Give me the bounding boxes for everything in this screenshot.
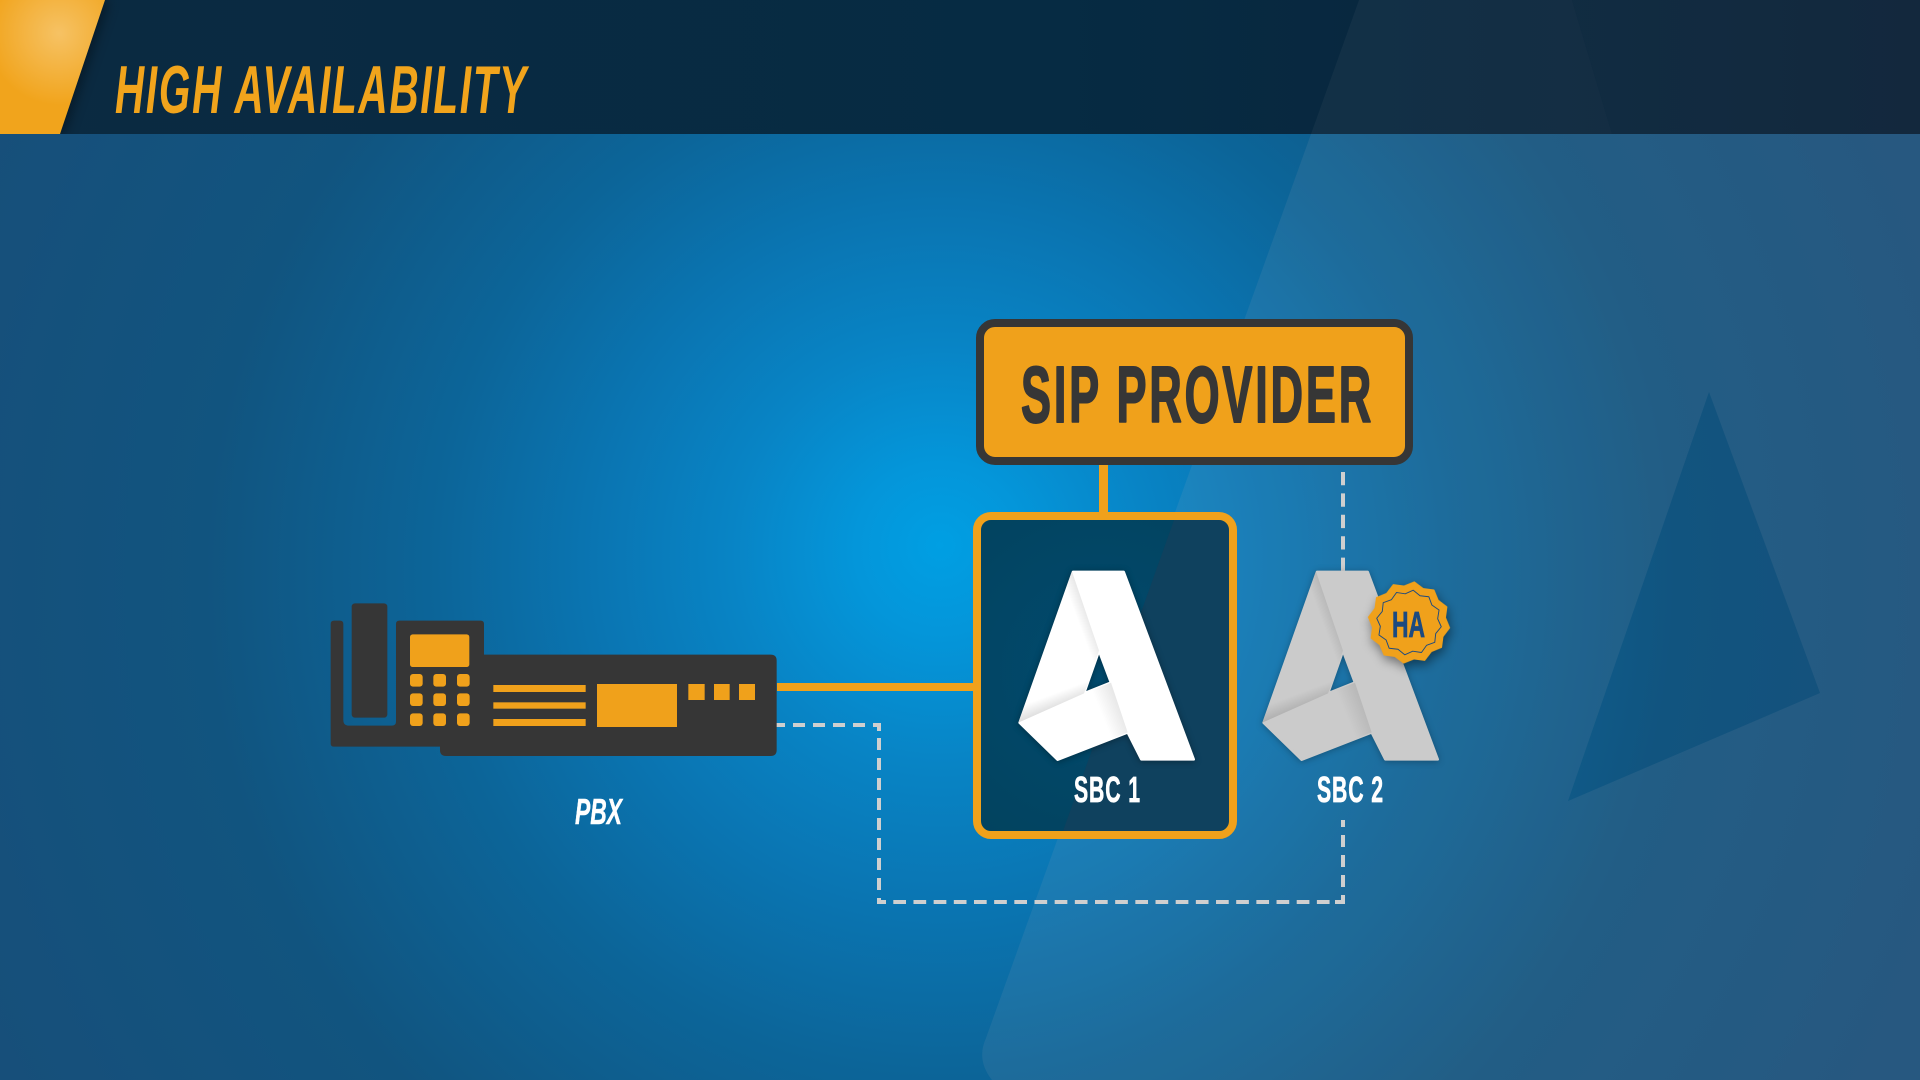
server display panel bbox=[597, 684, 677, 727]
title: HIGH AVAILABILITY bbox=[115, 52, 530, 128]
badge label: HA bbox=[1392, 604, 1425, 645]
PBX label: PBX bbox=[575, 791, 623, 832]
background watermark: large folded A logo bbox=[982, 134, 1920, 1080]
icon: white A logo bbox=[1018, 571, 1194, 760]
header bar bbox=[0, 0, 1920, 134]
dashed connection: SIP provider to SBC 2 bbox=[1341, 472, 1345, 571]
SBC 2 label: SBC 2 bbox=[1317, 769, 1384, 810]
SBC 1 label: SBC 1 bbox=[1074, 769, 1141, 810]
icon: HA badge bbox=[1363, 577, 1455, 668]
SBC 1 box border bbox=[977, 516, 1233, 835]
solid connection: PBX to SBC 1 bbox=[777, 683, 975, 691]
solid connection: SBC 1 to SIP provider bbox=[1099, 463, 1108, 515]
panel: SBC 1 bbox=[977, 516, 1233, 835]
SBC 1 box lighter facet bbox=[1063, 520, 1229, 831]
badge seal bbox=[1363, 577, 1455, 668]
orange header accent wedge bbox=[0, 0, 105, 134]
SIP provider label: SIP PROVIDER bbox=[1021, 350, 1374, 439]
badge inner ring bbox=[1372, 586, 1446, 659]
header watermark facet bbox=[1311, 0, 1612, 134]
SIP provider box bbox=[980, 323, 1409, 461]
server indicator lights bbox=[688, 684, 755, 700]
device silhouette bbox=[331, 621, 777, 756]
keypad bbox=[410, 674, 470, 726]
server vent lines bbox=[493, 685, 586, 726]
header watermark far facet bbox=[1572, 0, 1920, 134]
SBC 1 box fill bbox=[977, 516, 1233, 835]
icon: grey A logo bbox=[1262, 571, 1438, 760]
handset bbox=[352, 603, 387, 718]
panel: PBX bbox=[331, 603, 777, 832]
dashed connection: PBX to SBC 2 backup path bbox=[773, 723, 1345, 904]
panel: SBC 2 bbox=[1262, 571, 1455, 810]
icon: PBX desk phone and server unit bbox=[331, 603, 777, 756]
phone screen bbox=[410, 634, 469, 667]
panel: SIP provider bbox=[980, 323, 1409, 461]
